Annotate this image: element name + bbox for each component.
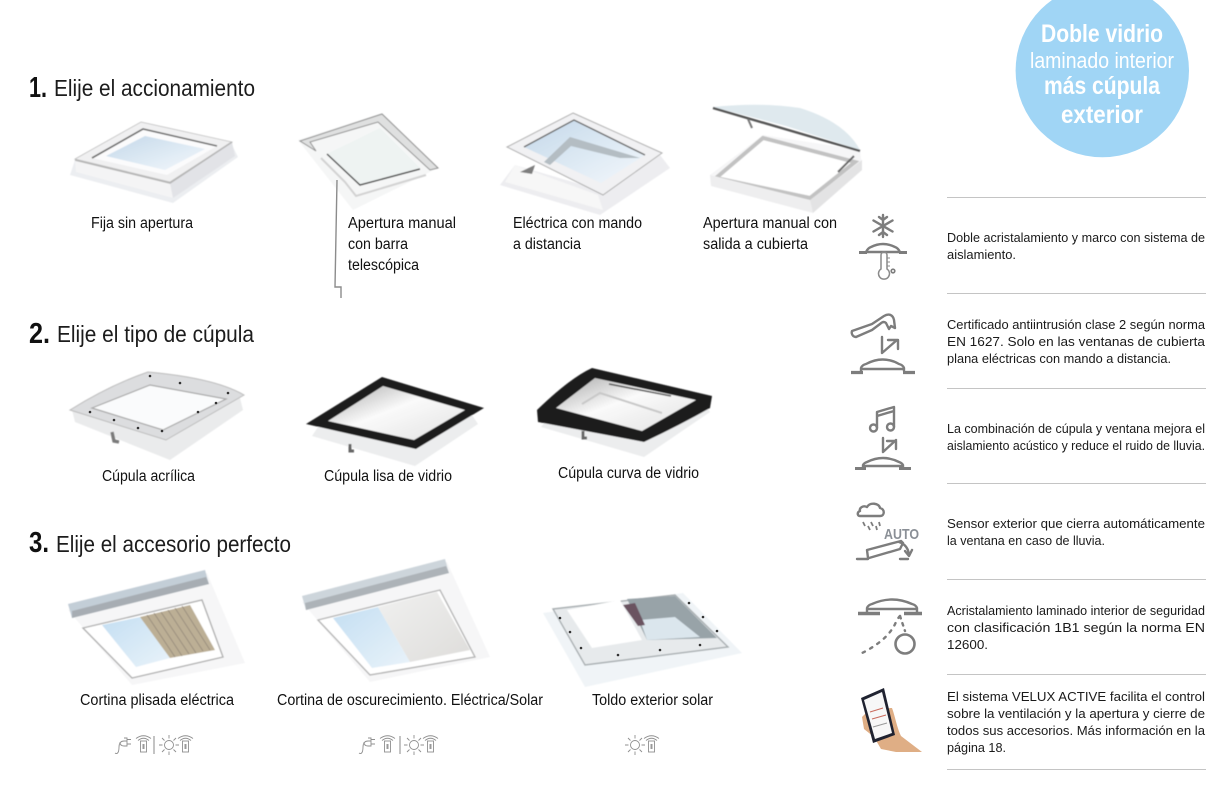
feature: acoustic insulation — [855, 407, 1205, 468]
product: blackout blind: Cortina de oscurecimiento. Eléctrica/Solar — [277, 692, 543, 709]
feature: rain sensor — [857, 504, 1205, 559]
feature: insulation: Doble acristalamiento y marco con sistema de — [947, 230, 1205, 245]
heading: step 1 — [29, 72, 255, 104]
product: acrylic dome: Cúpula acrílica — [102, 468, 195, 485]
feature: laminated safety glazing — [858, 600, 1205, 655]
icons: plug, remote, solar for pleated blind — [115, 735, 193, 755]
product: curved glass dome — [537, 368, 712, 482]
product: manual opening with roof exit — [703, 105, 862, 253]
icon: crowbar, arrow, dome — [851, 315, 915, 372]
feature: VELUX ACTIVE: todos sus accesorios. Más información en la — [947, 723, 1206, 738]
icon: music note, arrow, dome — [855, 407, 911, 468]
product: manual opening with telescopic rod: Apertura manual — [348, 215, 456, 232]
product: exterior solar awning: Toldo exterior solar — [592, 692, 713, 709]
heading: step 1: 1. — [29, 72, 47, 104]
heading: step 3: Elije el accesorio perfecto — [56, 531, 291, 557]
feature: laminated safety glazing: 12600. — [947, 637, 988, 652]
badge: glass specification circle: exterior — [1061, 101, 1143, 129]
product: exterior solar awning — [543, 593, 742, 709]
heading: step 2: 2. — [29, 318, 50, 350]
product: manual opening with telescopic rod — [298, 113, 456, 298]
product: electric pleated blind — [68, 570, 245, 709]
feature: anti-intrusion: EN 1627. Solo en las ventanas de cubierta — [947, 334, 1206, 349]
product: manual opening with telescopic rod: telescópica — [348, 257, 419, 274]
product: fixed skylight: Fija sin apertura — [91, 215, 193, 232]
icons: solar, remote for awning — [625, 735, 659, 755]
feature: rain sensor: Sensor exterior que cierra automáticamente — [947, 516, 1205, 531]
product: curved glass dome: Cúpula curva de vidrio — [558, 465, 699, 482]
heading: step 3: 3. — [29, 527, 49, 559]
icon: rain cloud, AUTO, closing window: AUTO — [884, 526, 919, 543]
icons: plug, remote, solar for blackout blind — [359, 735, 438, 755]
product: electric pleated blind: Cortina plisada eléctrica — [80, 692, 234, 709]
feature: anti-intrusion: Certificado antiintrusión clase 2 según norma — [947, 317, 1206, 332]
icon: rain cloud, AUTO, closing window — [857, 504, 919, 559]
badge: glass specification circle: laminado interior — [1030, 48, 1174, 73]
product: acrylic dome — [70, 372, 244, 485]
icon: snowflake, dome, thermometer — [859, 215, 907, 279]
icon: dome, impact path, sphere — [858, 600, 922, 655]
feature: anti-intrusion — [851, 315, 1206, 372]
product: blackout blind — [277, 559, 543, 709]
product: manual opening with telescopic rod: con barra — [348, 236, 408, 253]
icon: hand holding phone — [861, 688, 922, 752]
feature: VELUX ACTIVE: sobre la ventilación y la apertura y cierre de — [947, 706, 1205, 721]
badge: glass specification circle: Doble vidrio — [1041, 20, 1163, 48]
product: electric with remote — [500, 113, 670, 253]
product: flat glass dome: Cúpula lisa de vidrio — [324, 468, 452, 485]
product: manual opening with roof exit: salida a cubierta — [703, 236, 808, 253]
product: fixed skylight — [70, 122, 238, 232]
badge: glass specification circle — [1016, 0, 1189, 157]
feature: acoustic insulation: aislamiento acústico y reduce el ruido de lluvia. — [947, 438, 1205, 453]
feature: acoustic insulation: La combinación de cúpula y ventana mejora el — [947, 421, 1205, 436]
product: electric with remote: a distancia — [513, 236, 581, 253]
feature: rain sensor: la ventana en caso de lluvia. — [947, 533, 1105, 548]
feature: laminated safety glazing: Acristalamiento laminado interior de seguridad — [947, 603, 1205, 618]
feature: anti-intrusion: plana eléctricas con mando a distancia. — [947, 351, 1171, 366]
heading: step 1: Elije el accionamiento — [54, 75, 255, 101]
feature: insulation — [859, 215, 1205, 279]
heading: step 2: Elije el tipo de cúpula — [57, 321, 254, 347]
feature: VELUX ACTIVE: página 18. — [947, 740, 1006, 755]
feature: insulation: aislamiento. — [947, 247, 1016, 262]
badge: glass specification circle: más cúpula — [1044, 72, 1161, 100]
feature: laminated safety glazing: con clasificación 1B1 según la norma EN — [947, 620, 1205, 635]
product: flat glass dome — [306, 377, 484, 485]
heading: step 2 — [29, 318, 254, 350]
feature: VELUX ACTIVE — [861, 688, 1206, 755]
heading: step 3 — [29, 527, 291, 559]
feature: VELUX ACTIVE: El sistema VELUX ACTIVE facilita el control — [947, 689, 1205, 704]
product: electric with remote: Eléctrica con mando — [513, 215, 642, 232]
product: manual opening with roof exit: Apertura manual con — [703, 215, 837, 232]
